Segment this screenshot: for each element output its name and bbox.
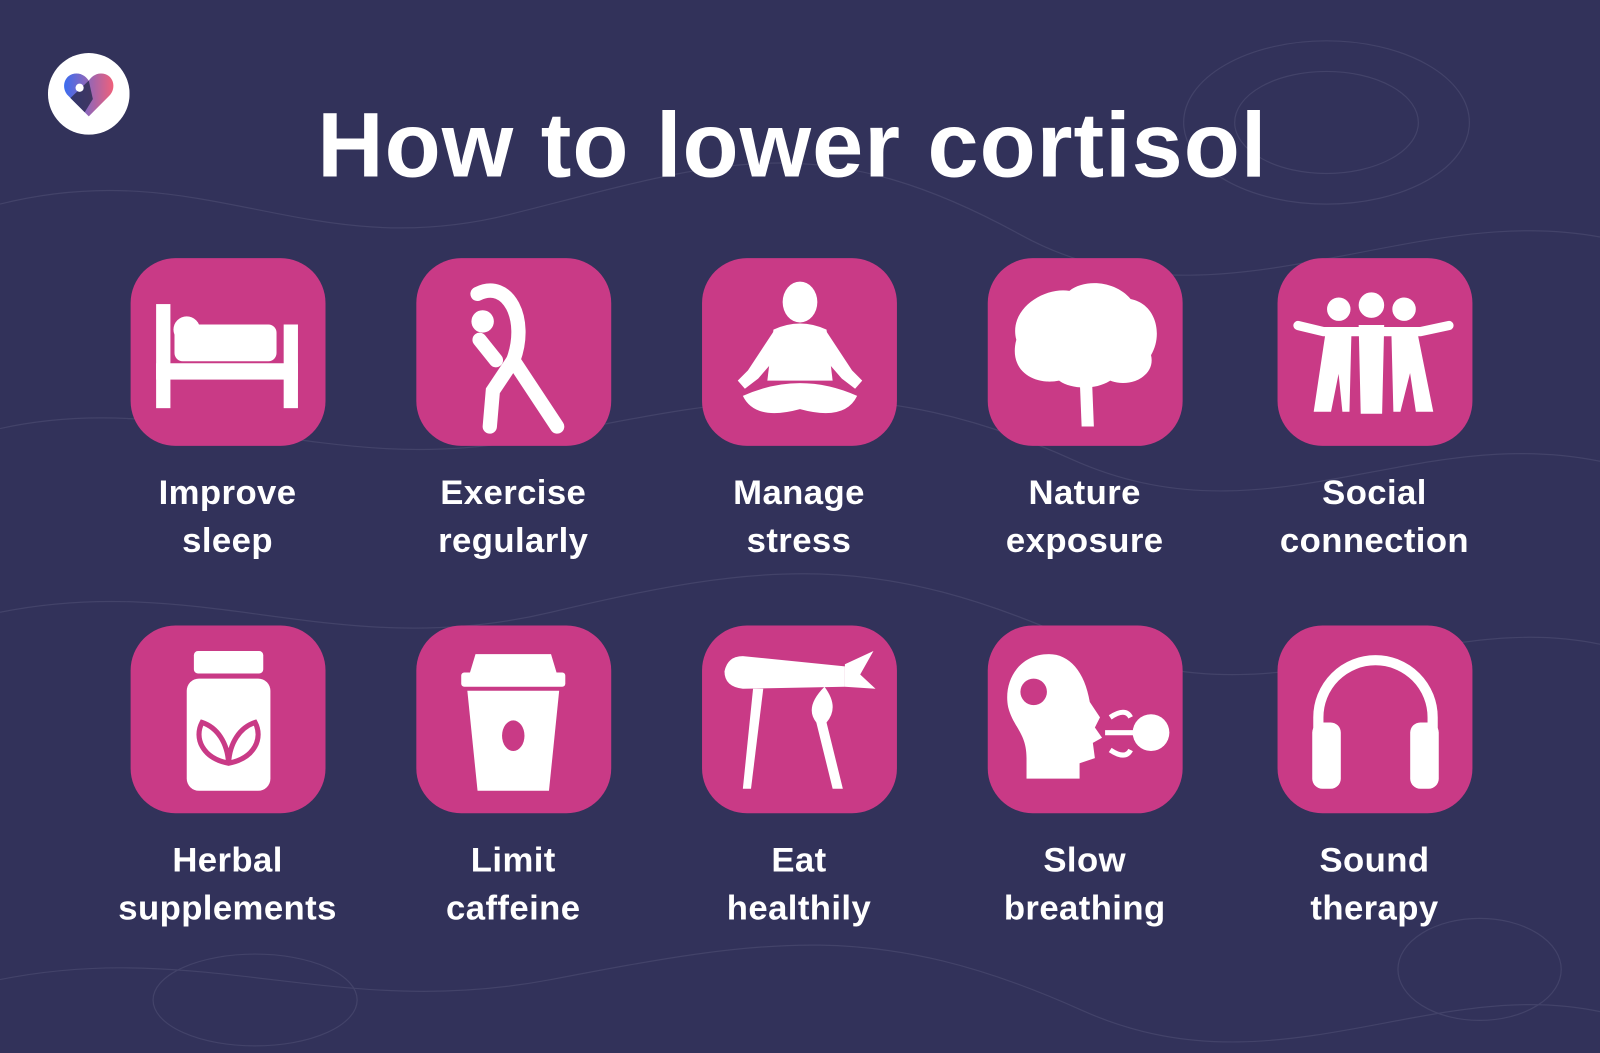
logo <box>48 53 130 135</box>
label: nature <box>1006 473 1163 560</box>
tile: improve sleep <box>131 258 326 446</box>
tile: herbal <box>131 626 326 813</box>
label: exercise: Exercise <box>440 473 586 512</box>
tile: sound therapy <box>1278 626 1472 813</box>
label: nature: Nature <box>1028 473 1141 512</box>
tile: social <box>1278 258 1472 446</box>
label: improve sleep <box>159 473 296 560</box>
label: manage stress: Manage <box>733 473 865 512</box>
label: eat healthily <box>727 841 871 928</box>
label: slow breathing: breathing <box>1004 889 1166 928</box>
label: manage stress <box>733 473 865 560</box>
label: caffeine: caffeine <box>446 889 580 928</box>
title: How to lower cortisol <box>317 95 1267 197</box>
label: exercise <box>438 473 588 560</box>
label: sound therapy: Sound <box>1319 841 1429 880</box>
label: improve sleep: sleep <box>182 521 273 560</box>
label: caffeine: Limit <box>471 841 556 880</box>
label: nature: exposure <box>1006 521 1163 560</box>
tile: slow breathing <box>988 626 1183 813</box>
label: caffeine <box>446 841 580 928</box>
label: slow breathing: Slow <box>1043 841 1126 880</box>
label: improve sleep: Improve <box>159 473 296 512</box>
tile: caffeine <box>416 626 611 813</box>
label: manage stress: stress <box>747 521 851 560</box>
tile: exercise <box>416 258 611 446</box>
tile: nature <box>988 258 1183 446</box>
label: exercise: regularly <box>438 521 588 560</box>
tile: eat healthily <box>702 626 897 813</box>
label: herbal: Herbal <box>172 841 283 880</box>
label: herbal: supplements <box>118 889 337 928</box>
label: eat healthily: Eat <box>771 841 827 880</box>
label: herbal <box>118 841 337 928</box>
label: social: Social <box>1322 473 1427 512</box>
tile: manage stress <box>702 258 897 446</box>
label: eat healthily: healthily <box>727 889 871 928</box>
label: social <box>1280 473 1469 560</box>
label: slow breathing <box>1004 841 1166 928</box>
label: social: connection <box>1280 521 1469 560</box>
label: sound therapy: therapy <box>1310 889 1439 928</box>
label: sound therapy <box>1310 841 1439 928</box>
